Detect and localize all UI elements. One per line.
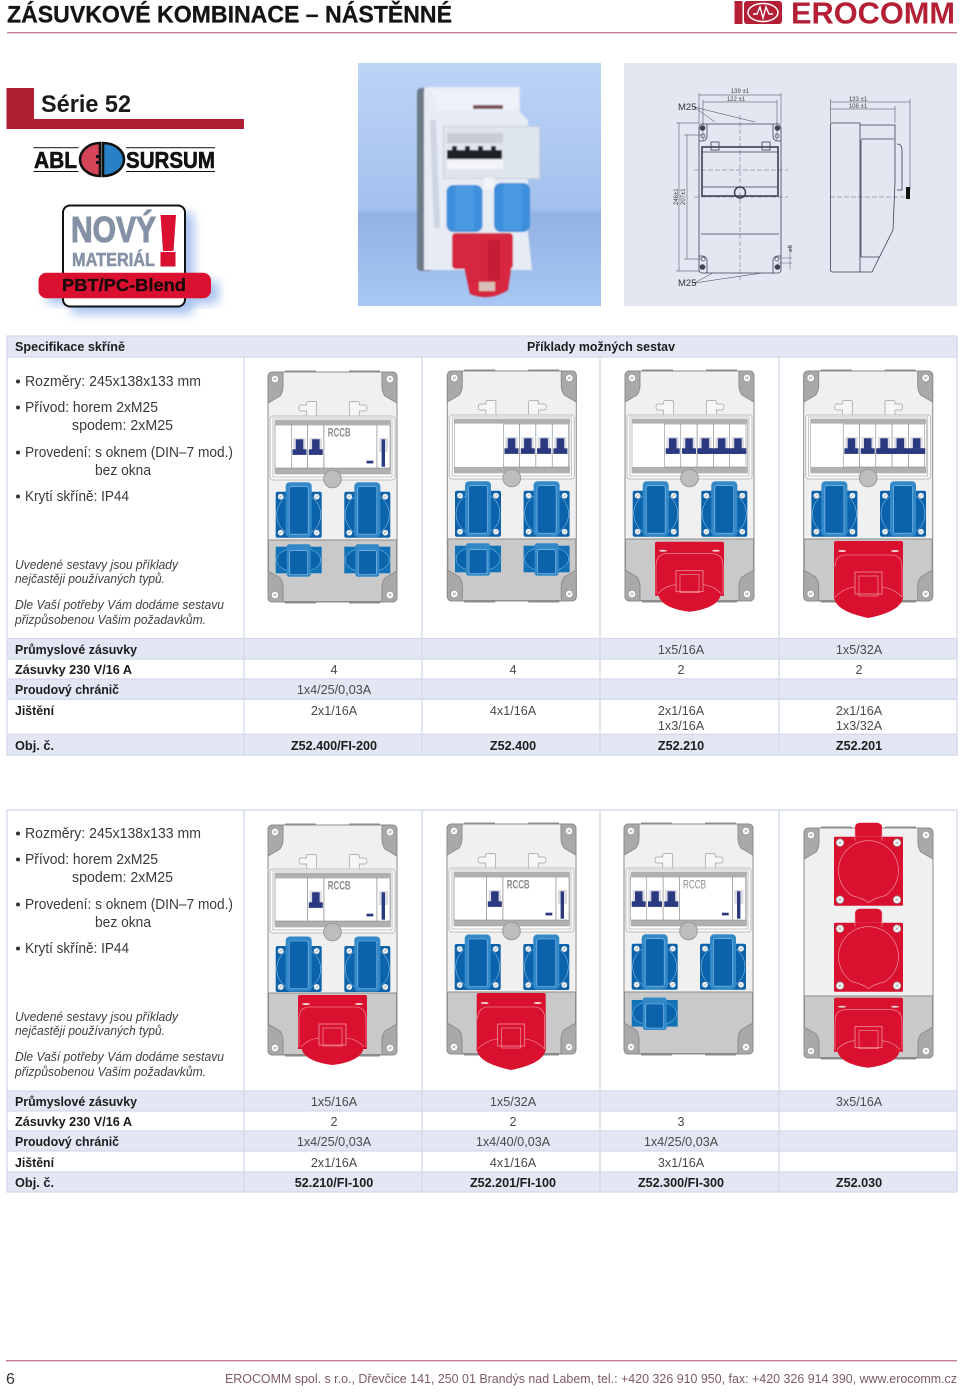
table 2 data: Průmyslové zásuvky [15, 1094, 138, 1109]
ABL Sursum logo: SURSUM [126, 147, 215, 173]
table 2 data: Z52.201/FI-100 [470, 1176, 556, 1190]
table 1 data: 4x1/16A [490, 704, 537, 718]
specification list 1: bez okna [95, 463, 151, 479]
specification list 1: spodem: 2xM25 [72, 418, 173, 434]
table 1 header: Specifikace skříně [15, 339, 125, 354]
table 1 data: 2x1/16A [836, 704, 883, 718]
badge: nový materiál: MATERIÁL [72, 249, 155, 270]
table 2 data: Proudový chránič [15, 1134, 119, 1149]
enclosure: Z52.300/FI-300: RCCB [683, 878, 706, 892]
badge: nový materiál: NOVÝ [71, 209, 156, 250]
specification list 1 [16, 374, 233, 505]
enclosure: 52.210/FI-100: RCCB [328, 880, 351, 892]
dimension labels [674, 89, 868, 289]
note 2 [14, 1010, 224, 1079]
table 2 data: 1x4/25/0,03A [297, 1135, 372, 1149]
enclosure: Z52.400/FI-200: RCCB [328, 426, 351, 440]
table 1 data: Proudový chránič [15, 682, 119, 697]
table 1 frame [7, 336, 957, 755]
table 1 data: 1x5/16A [658, 643, 705, 657]
enclosure: Z52.400 [447, 370, 576, 602]
table 2 data: Jištění [15, 1155, 54, 1170]
dimension labels: M25 [678, 102, 696, 113]
table 1 data: Z52.400 [490, 739, 536, 753]
specification list 2: spodem: 2xM25 [72, 870, 173, 886]
enclosure: Z52.030 [804, 823, 933, 1068]
table 1 data: 4 [509, 663, 517, 677]
technical drawing [624, 63, 957, 306]
front view [676, 93, 792, 283]
table 1 data: 1x4/25/0,03A [297, 683, 372, 697]
table 1 data: Průmyslové zásuvky [15, 642, 138, 657]
table 1 data: 4 [330, 663, 338, 677]
table 1 data: Jištění [15, 703, 54, 718]
table 1 data: 2x1/16A [658, 704, 705, 718]
header rule [7, 32, 957, 33]
table 2 data [15, 1094, 883, 1190]
table 1 data: Zásuvky 230 V/16 A [15, 662, 133, 677]
side view [830, 99, 910, 272]
specification list 2: Provedení: s oknem (DIN–7 mod.) [25, 897, 233, 913]
enclosure: Z52.201/FI-100: RCCB [507, 878, 530, 892]
specification list 1: Provedení: s oknem (DIN–7 mod.) [25, 445, 233, 461]
table 2 data: 1x4/40/0,03A [476, 1135, 551, 1149]
enclosure: Z52.201 [804, 370, 933, 618]
dimension labels: 246±1 [674, 188, 680, 205]
note 1: Uvedené sestavy jsou příklady [15, 558, 179, 572]
table 2 data: 1x5/32A [490, 1095, 537, 1109]
table 1 data: Obj. č. [15, 738, 54, 753]
table 2 data: Obj. č. [15, 1175, 54, 1190]
note 1 [14, 558, 224, 627]
enclosure: Z52.400/FI-200 [268, 370, 397, 604]
table 2 data: 4x1/16A [490, 1156, 537, 1170]
table 1 header [15, 339, 676, 354]
page number: 6 [6, 1371, 15, 1388]
dimension labels: 133 ±1 [849, 97, 868, 103]
note 1: Dle Vaší potřeby Vám dodáme sestavu [15, 598, 224, 612]
table 2 data: Z52.030 [836, 1176, 882, 1190]
section heading: Série 52 [6, 88, 244, 129]
dimension labels: 108 ±1 [849, 104, 868, 110]
table 2 data: 52.210/FI-100 [295, 1176, 373, 1190]
table 1 data: 1x5/32A [836, 643, 883, 657]
table 2 data: 1x4/25/0,03A [644, 1135, 719, 1149]
note 2: Dle Vaší potřeby Vám dodáme sestavu [15, 1050, 224, 1064]
dimension labels: M25 [678, 278, 696, 289]
specification list 2: Krytí skříně: IP44 [25, 941, 129, 957]
enclosure: 52.210/FI-100 [268, 824, 397, 1065]
dimension labels: 122 ±1 [727, 97, 746, 103]
table 1 header: Příklady možných sestav [527, 339, 676, 354]
enclosure: Z52.201/FI-100 [447, 822, 576, 1070]
badge: nový materiál: PBT/PC-Blend [62, 275, 186, 295]
ABL Sursum logo: ABL [34, 147, 77, 173]
specification list 2 [16, 826, 233, 957]
specification list 1: Krytí skříně: IP44 [25, 489, 129, 505]
note 1: nejčastěji používaných typů. [15, 572, 165, 586]
note 2: Uvedené sestavy jsou příklady [15, 1010, 179, 1024]
table 1 data: Z52.210 [658, 739, 704, 753]
table 1 data [15, 642, 883, 753]
specification list 2: bez okna [95, 915, 151, 931]
table 2 data: 2 [509, 1115, 517, 1129]
specification list 2: Přívod: horem 2xM25 [25, 852, 158, 868]
product photo [358, 63, 601, 306]
dimension labels: 207±1 [681, 188, 687, 205]
table 1 data: 2x1/16A [311, 704, 358, 718]
note 2: přizpůsobenou Vašim požadavkům. [14, 1065, 206, 1079]
table 2 data: 2x1/16A [311, 1156, 358, 1170]
footer rule [6, 1360, 957, 1361]
table 2 data: 2 [330, 1115, 338, 1129]
specification list 2: Rozměry: 245x138x133 mm [25, 826, 201, 842]
table 2 data: 3x1/16A [658, 1156, 705, 1170]
dimension labels: ⌀6 [788, 244, 794, 252]
badge: nový materiál [38, 206, 219, 314]
table 1 data: Z52.400/FI-200 [291, 739, 377, 753]
enclosure: Z52.210 [625, 370, 754, 612]
enclosure: Z52.300/FI-300 [624, 822, 753, 1056]
specification list 1: Přívod: horem 2xM25 [25, 400, 158, 416]
section heading: Série 52: Série 52 [41, 91, 131, 118]
table 1 data: 2 [677, 663, 685, 677]
note 1: přizpůsobenou Vašim požadavkům. [14, 613, 206, 627]
table 2 frame [7, 810, 957, 1192]
ABL Sursum logo [34, 143, 215, 176]
table 2 data: 3 [677, 1115, 685, 1129]
table 2 data: Zásuvky 230 V/16 A [15, 1114, 133, 1129]
table 2 data: 3x5/16A [836, 1095, 883, 1109]
dimension labels: 139 ±1 [731, 89, 750, 95]
note 2: nejčastěji používaných typů. [15, 1024, 165, 1038]
table 1 data: 1x3/32A [836, 719, 883, 733]
title: ZÁSUVKOVÉ KOMBINACE – NÁSTĚNNÉ [7, 0, 452, 28]
table 2 data: 1x5/16A [311, 1095, 358, 1109]
table 1 data: 2 [855, 663, 863, 677]
table 1 data: 1x3/16A [658, 719, 705, 733]
table 1 data: Z52.201 [836, 739, 882, 753]
table 2 data: Z52.300/FI-300 [638, 1176, 724, 1190]
specification list 1: Rozměry: 245x138x133 mm [25, 374, 201, 390]
